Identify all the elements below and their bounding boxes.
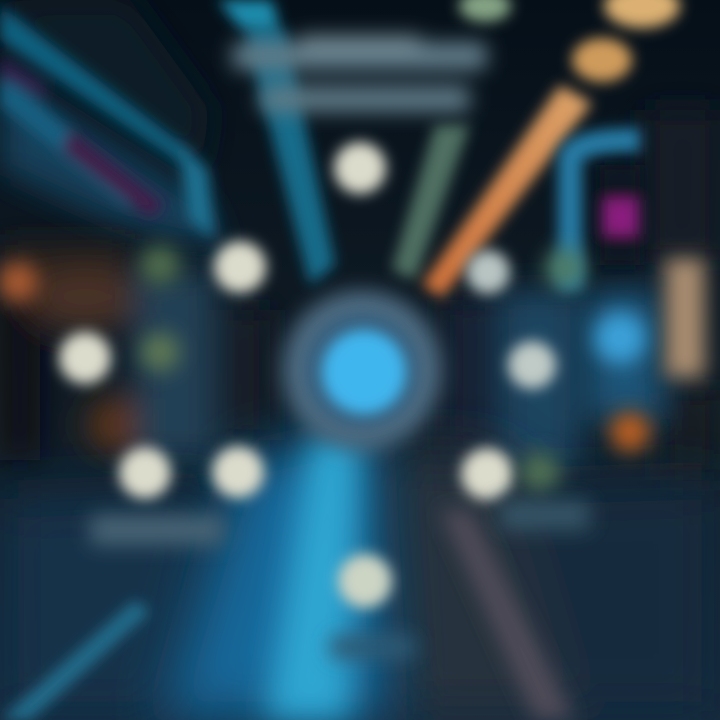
icon: right node xyxy=(508,341,556,389)
arrow: green beam xyxy=(392,0,511,280)
icon: magenta indicator xyxy=(600,165,640,265)
panel: lower floor xyxy=(0,450,720,720)
panel: upper left teal wall xyxy=(0,0,225,250)
panel: far right tan column xyxy=(665,258,705,378)
icon: upper right node xyxy=(466,250,510,294)
text block: lower labels xyxy=(90,500,590,659)
panel: left teal streaks xyxy=(0,5,215,240)
icon: lower middle left node xyxy=(212,446,264,498)
icon: accent dots xyxy=(0,245,650,492)
arrow: orange beam xyxy=(422,0,680,298)
icon: lower left node xyxy=(119,447,171,499)
heading: blurred title xyxy=(232,36,487,112)
arrow: lower left light streak xyxy=(0,600,150,720)
icon: nodes xyxy=(59,142,556,608)
icon: left node xyxy=(59,332,111,384)
panel: central ring xyxy=(282,290,442,450)
icon: bottom node xyxy=(338,554,392,608)
arrow: top teal beam xyxy=(218,0,335,285)
panel: right blue columns xyxy=(445,110,720,480)
icon: upper left node xyxy=(214,241,266,293)
panel: right blue arch xyxy=(570,140,640,290)
icon: lower right node xyxy=(461,448,513,500)
arrow: lower right reddish streak xyxy=(440,510,575,720)
panel: left dark brown area xyxy=(0,245,270,460)
chart: central blue beam xyxy=(160,430,390,720)
icon: top node xyxy=(334,142,386,194)
